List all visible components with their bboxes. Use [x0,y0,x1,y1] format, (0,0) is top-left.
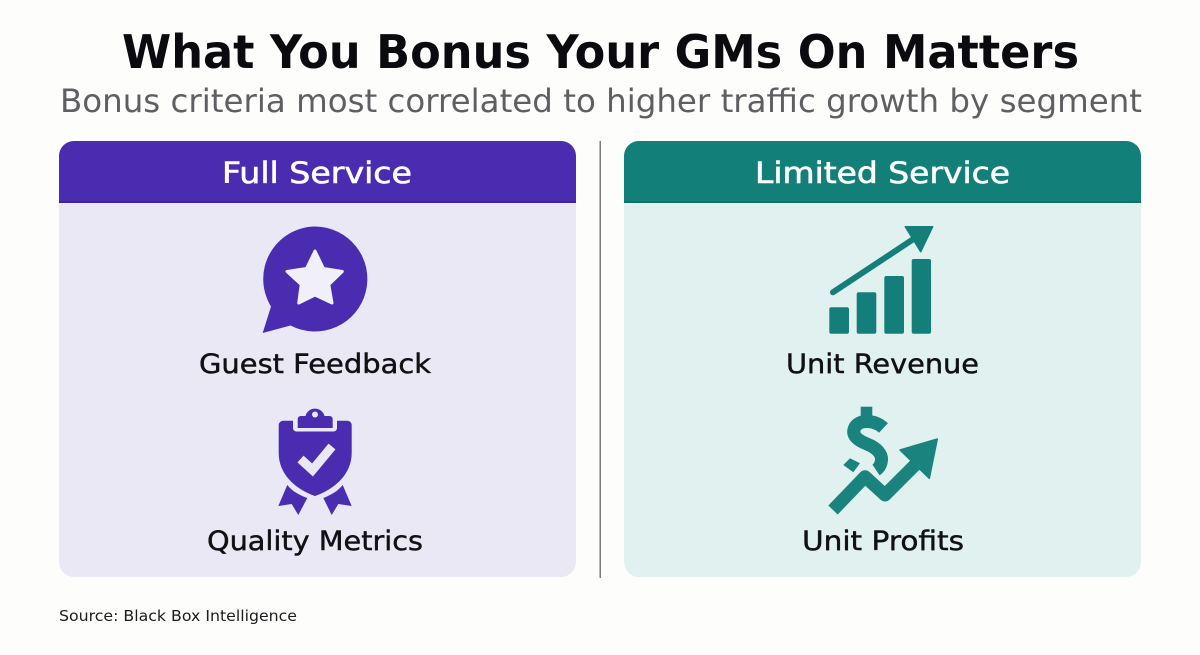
source note: Source: Black Box Intelligence [59,607,297,625]
label: unit revenue: Unit Revenue [786,349,979,380]
label: quality metrics: Quality Metrics [207,526,423,557]
title: What You Bonus Your GMs On Matters [122,25,1079,79]
panel header: full service [59,141,576,203]
icon: clipboard shield with check and ribbons [278,409,352,515]
label: guest feedback: Guest Feedback [199,349,431,380]
panel header: limited service [624,141,1141,203]
icon: dollar sign with rising arrow [833,407,937,510]
panel header: limited service: Limited Service [755,156,1010,190]
label: unit profits: Unit Profits [802,526,964,557]
subtitle: Bonus criteria most correlated to higher traffic growth by segment [60,82,1142,120]
panel: limited service [624,141,1141,577]
icon: rising bar chart with arrow [829,227,933,334]
panel: full service [59,141,576,577]
panel header: full service: Full Service [222,156,412,190]
divider [600,141,601,578]
icon: speech bubble with star [263,226,367,333]
